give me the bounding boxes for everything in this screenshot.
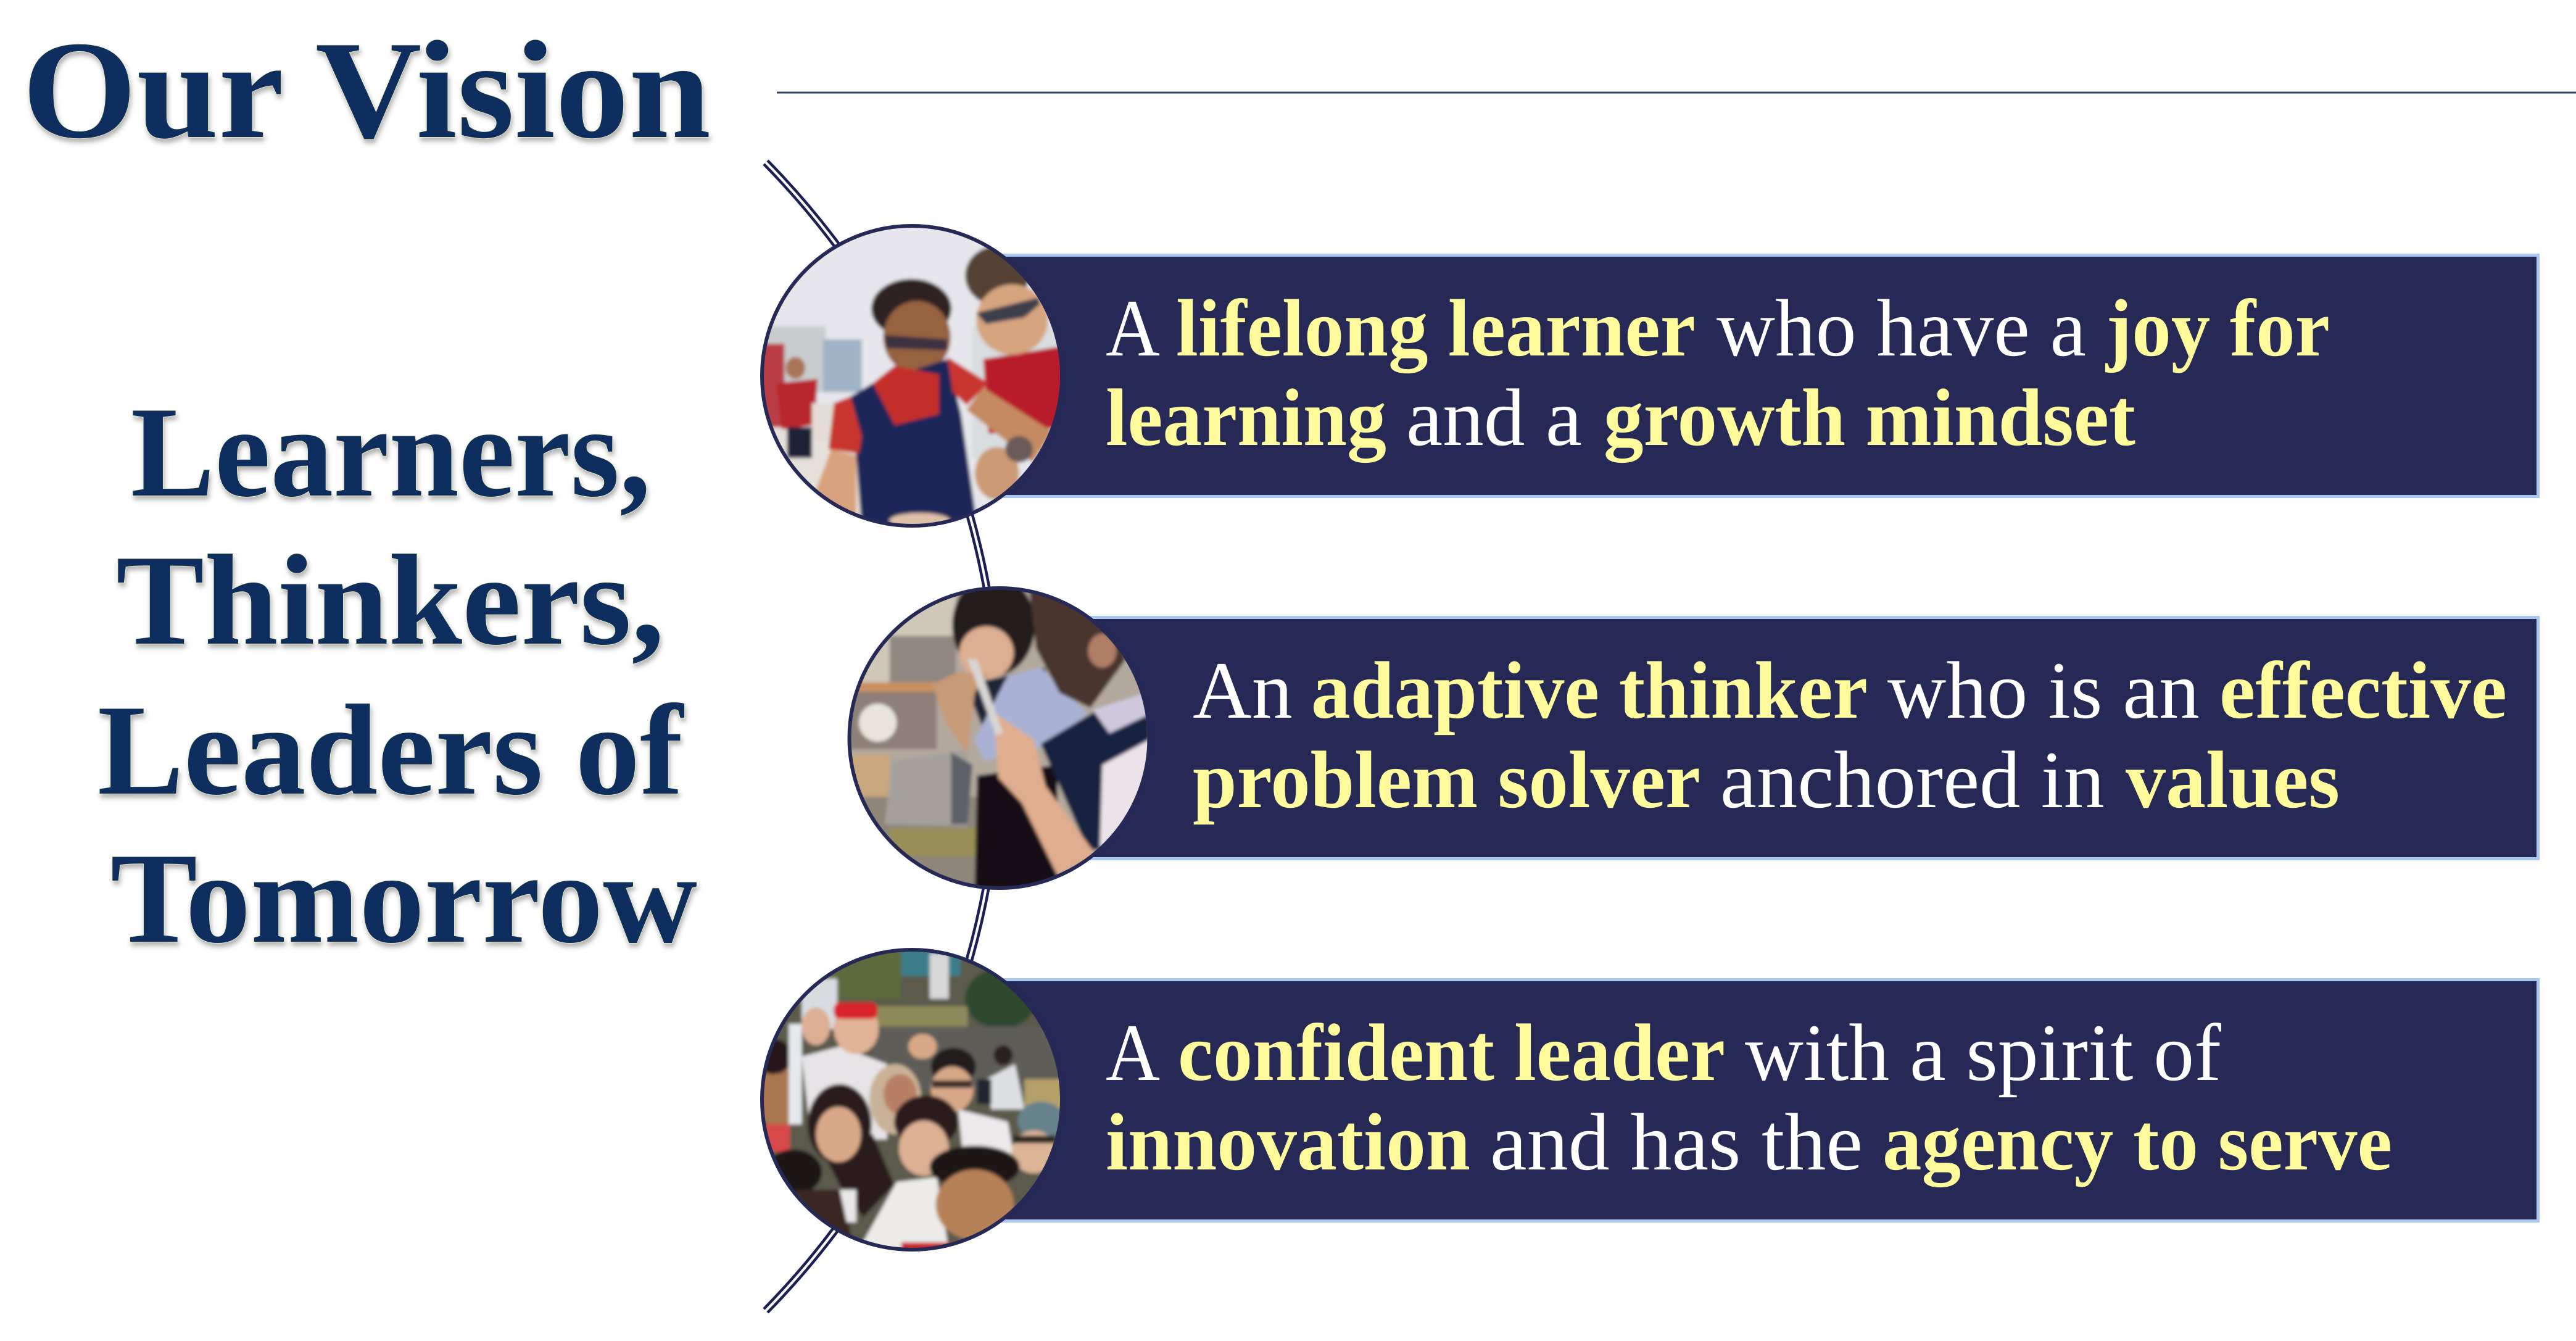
panel text: adaptive thinker: who is an <box>1887 645 2200 736</box>
slogan: Learners, Thinkers, Leaders of Tomorrow: Thinkers, <box>116 529 665 672</box>
panel text: adaptive thinker <box>1193 645 2507 825</box>
panel text: lifelong learner: growth mindset <box>1604 372 2135 463</box>
panel text: lifelong learner: A <box>1106 283 1160 373</box>
panel text: lifelong learner: learning <box>1106 372 1386 463</box>
panel text: adaptive thinker: An <box>1193 645 1293 736</box>
panel text: adaptive thinker: effective <box>2219 645 2507 736</box>
title: Our Vision: Our Vision <box>22 13 711 168</box>
curved double-line connector <box>766 162 1000 1311</box>
panel text: adaptive thinker: problem solver <box>1193 734 1700 825</box>
photo circle: students building a project <box>848 586 1148 890</box>
slogan: Learners, Thinkers, Leaders of Tomorrow: Leaders of <box>97 679 684 822</box>
panel text: adaptive thinker: values <box>2126 734 2340 825</box>
panel text: lifelong learner: joy for <box>2105 283 2330 373</box>
panel text: confident leader: confident leader <box>1178 1007 1725 1098</box>
panel text: confident leader: agency to serve <box>1882 1097 2392 1187</box>
photo circle: group of student leaders <box>760 948 1060 1252</box>
panel: adaptive thinker <box>1000 617 2538 859</box>
panel text: confident leader: innovation <box>1106 1097 1470 1187</box>
panel text: lifelong learner: and a <box>1406 372 1582 463</box>
slogan: Learners, Thinkers, Leaders of Tomorrow <box>97 381 697 970</box>
panel text: adaptive thinker: anchored in <box>1720 734 2105 825</box>
photo circle: students learning together <box>760 224 1060 528</box>
panel text: confident leader: and has the <box>1490 1097 1863 1187</box>
panel text: confident leader: A <box>1106 1007 1160 1098</box>
panel: confident leader <box>912 980 2538 1221</box>
slogan: Learners, Thinkers, Leaders of Tomorrow: Learners, <box>131 381 651 524</box>
panel text: confident leader: with a spirit of <box>1745 1007 2221 1098</box>
title rule line <box>777 91 2576 94</box>
panel text: confident leader <box>1106 1007 2392 1187</box>
panel text: adaptive thinker: adaptive thinker <box>1311 645 1868 736</box>
panel text: lifelong learner: lifelong learner <box>1176 283 1696 373</box>
panel text: lifelong learner <box>1106 283 2330 463</box>
slogan: Learners, Thinkers, Leaders of Tomorrow: Tomorrow <box>110 827 697 970</box>
panel text: lifelong learner: who have a <box>1717 283 2086 373</box>
panel: lifelong learner <box>912 255 2538 496</box>
